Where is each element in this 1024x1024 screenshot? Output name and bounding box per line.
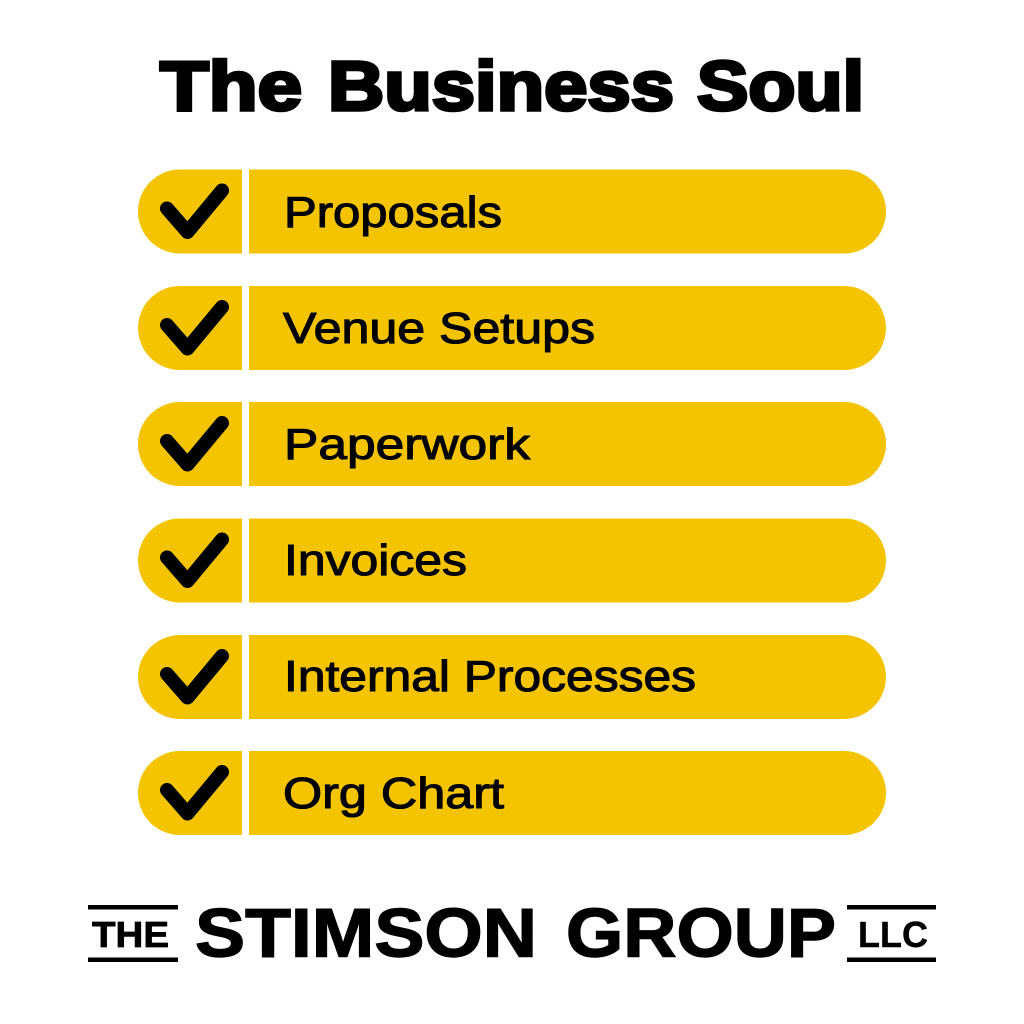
label bar: Venue Setups: [249, 286, 886, 370]
label bar: Invoices: Invoices: [284, 536, 467, 585]
logo: The Stimson Group LLC: [88, 894, 936, 972]
label bar: Paperwork: [249, 402, 886, 486]
title: [160, 47, 864, 125]
label bar: Org Chart: [249, 751, 886, 835]
icon: check badge: [138, 170, 242, 254]
icon: check badge: [138, 635, 242, 719]
icon: check badge: [138, 402, 242, 486]
logo name: STIMSON GROUP: GROUP: [566, 894, 836, 972]
title: Business: [328, 47, 674, 125]
row: Paperwork: [138, 402, 886, 486]
logo name: STIMSON GROUP: [195, 894, 836, 972]
title: The: [160, 47, 302, 125]
row: Proposals: [138, 170, 886, 254]
label bar: Venue Setups: Venue Setups: [283, 304, 595, 353]
icon: check badge: [138, 518, 242, 602]
label bar: Internal Processes: Internal Processes: [284, 652, 696, 701]
icon: check badge: [138, 751, 242, 835]
label bar: Org Chart: Org Chart: [283, 769, 504, 818]
logo suffix: LLC: LLC: [858, 914, 928, 955]
logo prefix: THE: [88, 905, 178, 962]
row: Invoices: [138, 518, 886, 602]
logo prefix: THE: THE: [92, 914, 169, 955]
icon: check badge: [138, 286, 242, 370]
row: Internal Processes: [138, 635, 886, 719]
row: Venue Setups: [138, 286, 886, 370]
label bar: Invoices: [249, 518, 886, 602]
logo suffix: LLC: [847, 905, 936, 962]
label bar: Paperwork: Paperwork: [284, 420, 531, 469]
label bar: Proposals: [249, 170, 886, 254]
title: Soul: [697, 47, 864, 125]
row: Org Chart: [138, 751, 886, 835]
logo name: STIMSON GROUP: STIMSON: [195, 894, 537, 972]
label bar: Internal Processes: [249, 635, 886, 719]
label bar: Proposals: Proposals: [284, 188, 502, 237]
checklist: [138, 170, 886, 835]
